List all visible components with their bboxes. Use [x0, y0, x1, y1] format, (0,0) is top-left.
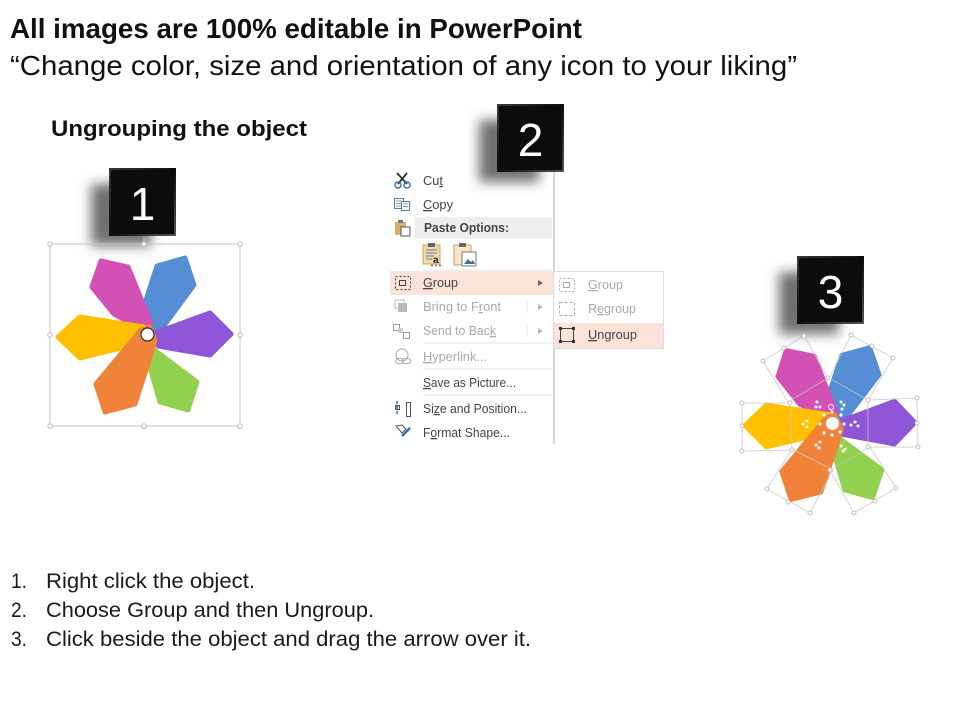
- title: “Change color, size and orientation of any icon to your liking”: [10, 50, 797, 81]
- number badge 1: 1: [130, 178, 155, 230]
- submenu: Regroup: [588, 302, 636, 316]
- menu labels: Bring to Front: [423, 300, 502, 314]
- menu labels: [423, 174, 527, 440]
- petal: purple: [151, 313, 231, 355]
- menu labels: Group: [423, 276, 458, 290]
- petal: pink: [92, 261, 151, 332]
- icon: bring to front: [395, 300, 407, 312]
- flower: step 3 ungrouped petals: [740, 333, 920, 515]
- number badge 2 shadow: [479, 120, 539, 182]
- icon: paste picture: [454, 243, 476, 266]
- step 3: 3.: [11, 628, 27, 651]
- petals: [744, 347, 916, 501]
- step 2: Choose Group and then Ungroup.: [46, 599, 374, 622]
- context menu: [390, 172, 664, 444]
- number badge 2: [497, 104, 564, 172]
- menu labels: Copy: [423, 198, 454, 212]
- icon: send to back: [394, 324, 410, 338]
- menu labels: Size and Position...: [423, 402, 527, 416]
- petal: orange: [96, 327, 155, 412]
- selection box: step 1: [48, 237, 242, 428]
- paste options band: [415, 217, 552, 239]
- title: [10, 13, 797, 81]
- icon: clipboard: [395, 220, 410, 236]
- petal: yellow: [58, 317, 144, 358]
- petal: blue: [146, 258, 194, 333]
- menu labels: Send to Back: [423, 324, 497, 338]
- icon: paste keep text: [423, 243, 441, 266]
- menu right edge: [553, 172, 555, 444]
- separators: [423, 270, 552, 395]
- petal selection handles: [740, 333, 920, 515]
- heading: ungrouping the object: Ungrouping the object: [51, 116, 308, 141]
- menu labels: Hyperlink...: [423, 350, 487, 364]
- number badge 2: 2: [518, 114, 543, 166]
- step 2: 2.: [11, 599, 27, 622]
- icon: format shape: [396, 425, 410, 436]
- menu labels: Cut: [423, 174, 444, 188]
- step 3: Click beside the object and drag the arrow over it.: [46, 628, 531, 651]
- pivot handle: [141, 328, 154, 341]
- center and rotation handles: [802, 400, 860, 452]
- step 1: 1.: [11, 570, 27, 593]
- group row highlight: [390, 271, 553, 295]
- icon: hyperlink: [396, 349, 410, 364]
- menu labels: Paste Options:: [424, 221, 509, 235]
- icon: copy: [394, 198, 410, 210]
- menu labels: Format Shape...: [423, 426, 510, 440]
- petal selection boxes: [742, 335, 918, 513]
- number badge 3: [779, 256, 864, 334]
- icon: size and position: [396, 401, 410, 416]
- submenu: Ungroup: [588, 328, 637, 342]
- title: All images are 100% editable in PowerPoint: [10, 13, 582, 44]
- flower: step 1 grouped petals: [58, 258, 231, 412]
- instructions list: [11, 570, 531, 651]
- number badge 1: [91, 168, 176, 246]
- icon: paste keep text: a: [433, 255, 439, 266]
- number badge 3: 3: [818, 266, 843, 318]
- submenu: Group: [588, 278, 623, 292]
- submenu arrows: [527, 280, 543, 337]
- icon: group: [396, 276, 410, 290]
- step 1: Right click the object.: [46, 570, 255, 593]
- submenu: [554, 272, 664, 348]
- menu labels: Save as Picture...: [423, 376, 516, 390]
- petal: green: [150, 349, 197, 410]
- icon: scissors: [395, 173, 410, 188]
